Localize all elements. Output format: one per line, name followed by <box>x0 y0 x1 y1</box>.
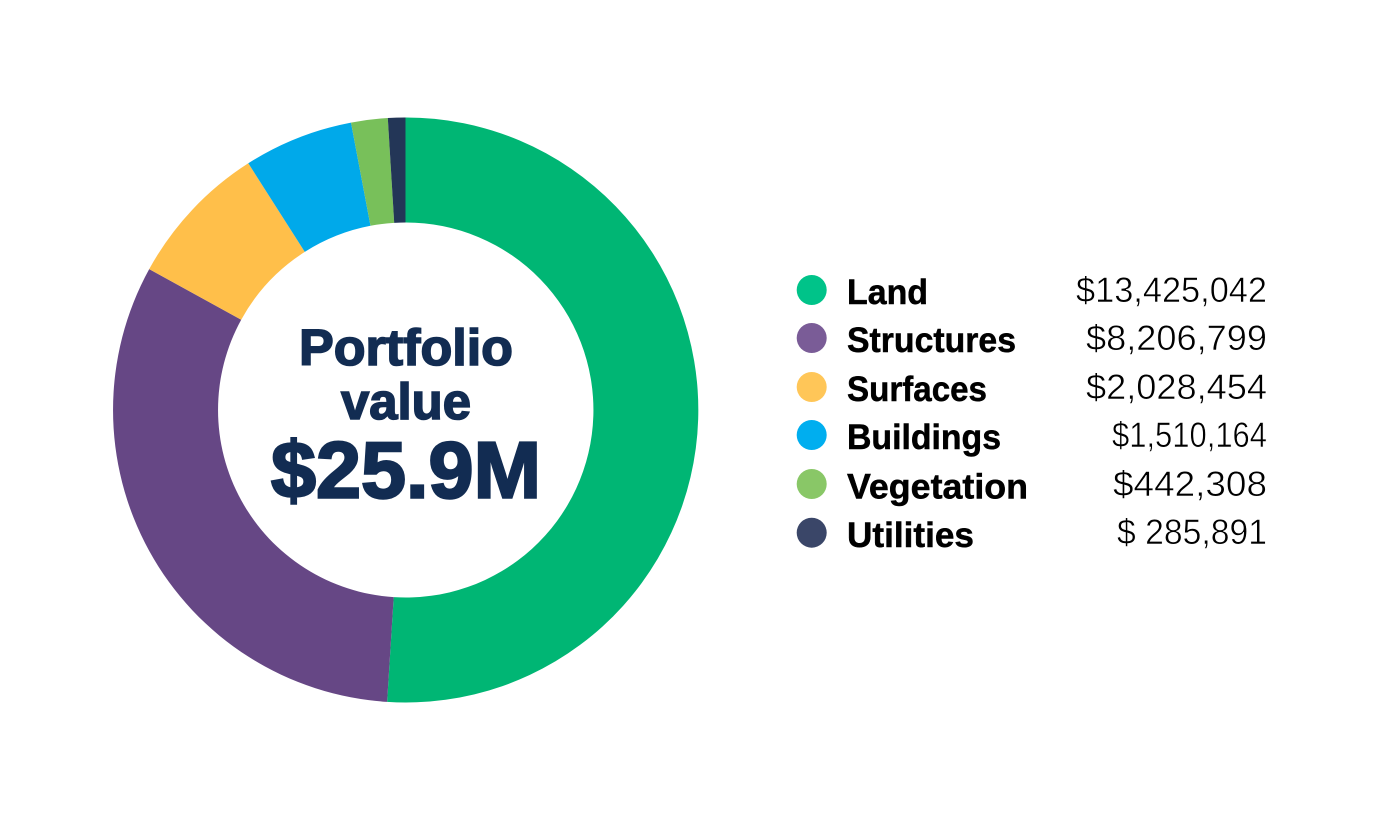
legend row: Land <box>797 271 1267 312</box>
legend row: Surfaces: Surfaces <box>847 370 987 409</box>
legend row: Surfaces: $2,028,454 <box>1086 368 1267 407</box>
heading: value: value <box>341 373 471 430</box>
heading: Portfolio: Portfolio <box>299 319 513 376</box>
legend row: Utilities <box>797 513 1267 555</box>
legend row: Structures: Structures <box>847 321 1016 360</box>
segment: Buildings <box>248 123 370 252</box>
segment: Structures <box>113 269 394 702</box>
legend row: Vegetation <box>797 465 1267 506</box>
segment: Land <box>387 117 698 702</box>
legend <box>797 271 1267 555</box>
legend row: Surfaces <box>797 368 1267 409</box>
legend row: Structures: $8,206,799 <box>1086 319 1267 358</box>
legend row: Utilities: $ 285,891 <box>1117 513 1267 552</box>
legend row: Structures <box>797 319 1267 360</box>
legend row: Utilities: Utilities <box>847 516 974 555</box>
legend row: Vegetation: $442,308 <box>1113 465 1267 504</box>
donut chart <box>113 117 698 702</box>
legend row: Buildings: Buildings <box>847 418 1001 457</box>
legend row: Buildings <box>797 416 1267 457</box>
total value: $25.9M <box>271 426 541 514</box>
legend row: Vegetation: Vegetation <box>847 468 1028 506</box>
segment: Vegetation <box>351 118 394 226</box>
center label <box>271 319 541 514</box>
legend row: Land: $13,425,042 <box>1076 271 1267 310</box>
segment: Surfaces <box>149 163 305 320</box>
legend row: Land: Land <box>847 273 928 312</box>
segment: Utilities <box>388 117 406 223</box>
legend row: Buildings: $1,510,164 <box>1112 416 1267 455</box>
